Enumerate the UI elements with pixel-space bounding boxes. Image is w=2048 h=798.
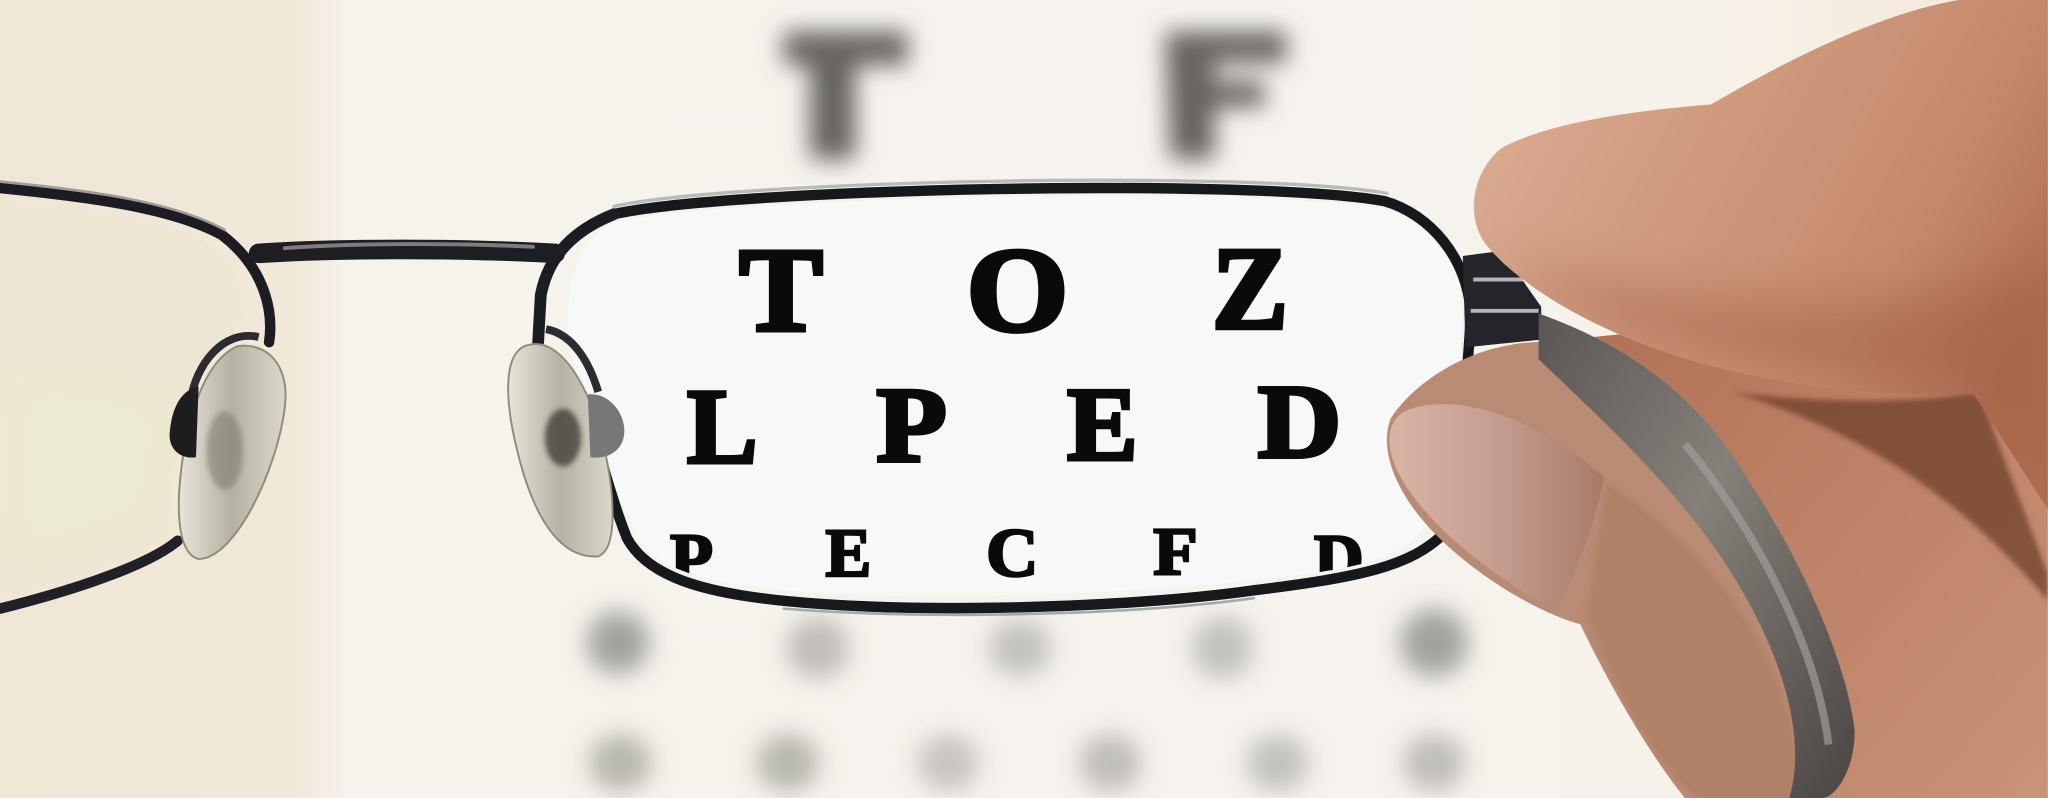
chart row 3: P E C F D: D: [1314, 520, 1364, 596]
blurred eye chart letters, lower rows: [586, 609, 1468, 791]
shadow right of finger: [1731, 392, 2048, 601]
chart row 1: T O Z: O: [967, 223, 1068, 356]
chart row 3: P E C F D: E: [825, 514, 871, 591]
left lens: [0, 202, 242, 596]
chart row 3: P E C F D: [670, 528, 1362, 578]
chart row 1: T O Z: T: [739, 223, 823, 356]
chart row 2: L P E D: P: [876, 367, 947, 485]
index finger: [1474, 0, 2048, 509]
left lens rim: [0, 188, 270, 342]
chart row 3: P E C F D: F: [1153, 514, 1198, 590]
chart row 1: T O Z: Z: [1212, 224, 1288, 354]
chart row 3: P E C F D: P: [670, 521, 713, 599]
chart row 2: L P E D: E: [1067, 367, 1138, 483]
finger shading: [1533, 264, 2031, 406]
chart row 1: T O Z: [738, 248, 1284, 334]
glasses frame: [0, 180, 1471, 615]
icon: left nose pad: [170, 336, 286, 559]
knuckle skin texture: [1587, 483, 1800, 798]
icon: hinge: [1463, 251, 1541, 347]
temple arm: [1539, 313, 1855, 798]
hand: [1371, 0, 2048, 798]
icon: right nose pad: [508, 329, 624, 556]
chart row 2: L P E D: D: [1258, 364, 1341, 480]
thumb: [1387, 342, 1829, 798]
thumbnail: [1389, 404, 1604, 611]
right lens with sharp eye chart: [568, 196, 1463, 599]
right lens rim: [601, 188, 1471, 608]
bridge: [259, 249, 555, 253]
chart row 2: L P E D: L: [687, 368, 758, 486]
palm and back of hand: [1386, 334, 2048, 798]
chart row 2: L P E D: [686, 386, 1338, 464]
blurred eye chart letters, top row: [784, 31, 1287, 159]
chart row 3: P E C F D: C: [986, 514, 1038, 591]
